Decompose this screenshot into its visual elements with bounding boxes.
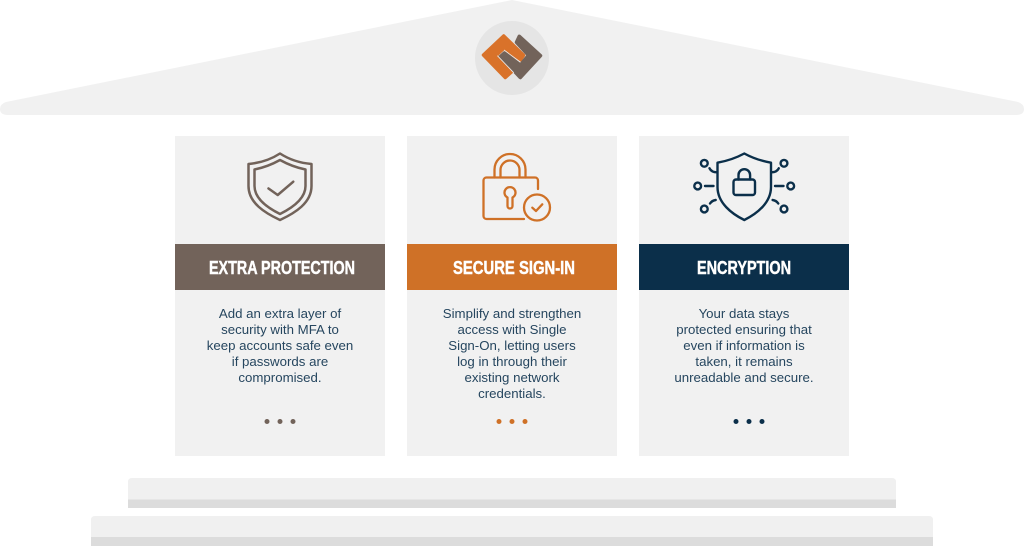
text: secure sign-in description: Sign-On, letting users: [448, 338, 576, 353]
text: encryption description: even if information is: [683, 338, 805, 353]
dots: navy: [734, 419, 764, 424]
text: encryption description: taken, it remains: [695, 354, 793, 369]
lower step: [91, 516, 933, 546]
text: secure sign-in description: access with Single: [458, 322, 566, 337]
heading band: encryption: ENCRYPTION: [697, 258, 791, 278]
text: secure sign-in description: Simplify and strengthen: [443, 306, 581, 321]
upper step: [128, 478, 896, 508]
roof: [0, 0, 1024, 115]
heading band: extra protection: EXTRA PROTECTION: [209, 258, 355, 278]
heading band: secure sign-in: [407, 244, 617, 290]
text: encryption description: Your data stays: [699, 306, 790, 321]
text: extra protection description: security with MFA to: [221, 322, 339, 337]
icon: shield with lock and circuit nodes: [694, 154, 794, 220]
text: encryption description: [674, 306, 814, 385]
text: extra protection description: keep accounts safe even: [207, 338, 353, 353]
panel: secure sign-in: [407, 136, 617, 456]
text: extra protection description: if passwords are: [232, 354, 328, 369]
text: secure sign-in description: existing network: [464, 370, 560, 385]
text: encryption description: unreadable and secure.: [674, 370, 814, 385]
text: secure sign-in description: log in through their: [457, 354, 567, 369]
heading band: extra protection: [175, 244, 385, 290]
icon: padlock with check badge: [484, 154, 550, 220]
panel: extra protection: [175, 136, 385, 456]
dots: brown: [264, 419, 296, 424]
dots: orange: [496, 419, 528, 424]
text: extra protection description: [207, 306, 353, 385]
text: extra protection description: Add an extra layer of: [219, 306, 341, 321]
text: secure sign-in description: credentials.: [478, 386, 546, 401]
icon: double shield with check: [248, 154, 312, 220]
logo badge: [475, 21, 549, 95]
heading band: secure sign-in: SECURE SIGN-IN: [453, 258, 575, 278]
text: extra protection description: compromised.: [238, 370, 322, 385]
text: encryption description: protected ensuring that: [676, 322, 812, 337]
heading band: encryption: [639, 244, 849, 290]
panel: encryption: [639, 136, 849, 456]
text: secure sign-in description: [443, 306, 581, 401]
